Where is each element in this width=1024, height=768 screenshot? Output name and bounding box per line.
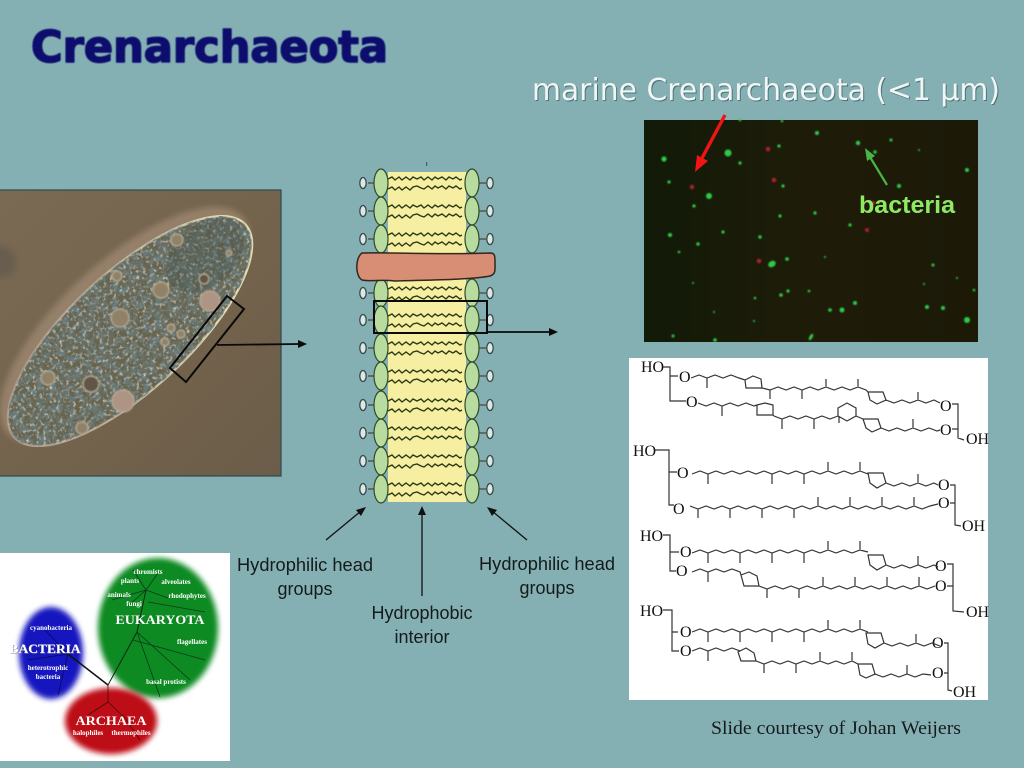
- structure 4: [640, 603, 977, 701]
- tree labels: plants: [121, 577, 139, 585]
- structure 3: O: [680, 544, 692, 561]
- tree labels: flagellates: [177, 638, 207, 646]
- green bacteria dots: [661, 119, 975, 342]
- credit: Slide courtesy of Johan Weijers: [711, 718, 961, 739]
- structure 2: O: [938, 477, 950, 494]
- panel: lipid structures: [629, 358, 990, 701]
- eukaryota blob: [98, 558, 218, 698]
- title: Crenarchaeota: [31, 22, 388, 73]
- structure 3: O: [676, 563, 688, 580]
- selection box on cell wall: [170, 296, 244, 382]
- tree labels: halophiles: [73, 729, 103, 737]
- arrow: left head groups: [326, 507, 366, 540]
- tree labels: alveolates: [161, 578, 191, 586]
- archaea blob: [65, 688, 157, 754]
- structure 2: HO: [633, 443, 656, 460]
- subtitle: marine Crenarchaeota: marine Crenarchaeota (<1 µm): [532, 73, 1000, 108]
- label: bacteria: bacteria: [859, 192, 956, 219]
- structure 2: O: [938, 495, 950, 512]
- vacuoles: [41, 234, 232, 434]
- tree labels: [10, 568, 207, 737]
- tree labels: chromists: [133, 568, 163, 576]
- structure 1: HO: [641, 359, 664, 376]
- tree labels: thermophiles: [111, 729, 151, 737]
- arrow: hydrophobic interior: [418, 506, 426, 596]
- green arrow: [865, 148, 887, 185]
- subtitle: marine Crenarchaeota: marine Crenarchaeota (<1 µm): [533, 74, 1001, 109]
- structure 2: O: [673, 501, 685, 518]
- structure 1: O: [686, 394, 698, 411]
- membrane diagram: [357, 162, 495, 503]
- tree labels: bacteria: [36, 673, 61, 681]
- red arrow: [695, 115, 725, 172]
- tree labels: basal protists: [146, 678, 186, 686]
- tree labels: animals: [107, 591, 131, 599]
- structure 3: HO: [640, 528, 663, 545]
- structure 3: O: [935, 578, 947, 595]
- label: hydrophilic head groups right: Hydrophilic head: [479, 554, 615, 574]
- tree labels: heterotrophic: [28, 664, 68, 672]
- tree labels: rhodophytes: [168, 592, 206, 600]
- structure 4: O: [680, 624, 692, 641]
- structure 1: O: [940, 422, 952, 439]
- arrow: cell to membrane: [217, 340, 307, 348]
- structure 3: [640, 528, 990, 621]
- cell body: [0, 181, 285, 481]
- label: hydrophilic head groups left: groups: [277, 579, 333, 599]
- tree labels: fungi: [126, 600, 142, 608]
- cell halo: [0, 169, 286, 481]
- tree labels: BACTERIA: [10, 641, 81, 656]
- structure 4: HO: [640, 603, 663, 620]
- structure 4: O: [932, 635, 944, 652]
- membrane protein: [357, 253, 495, 281]
- arrow: membrane to lipids: [487, 328, 558, 336]
- tree labels: cyanobacteria: [30, 624, 72, 632]
- structure 2: OH: [962, 518, 986, 535]
- structure 3: O: [935, 558, 947, 575]
- panel: cell photograph: [0, 169, 286, 481]
- label: hydrophilic head groups right: groups: [519, 578, 575, 598]
- hydrophilic head groups: [360, 169, 493, 503]
- label: hydrophobic interior: Hydrophobic: [371, 603, 473, 623]
- tree labels: ARCHAEA: [76, 713, 147, 728]
- structure 1: [641, 359, 990, 448]
- tree labels: EUKARYOTA: [116, 612, 205, 627]
- structure 1: O: [679, 369, 691, 386]
- tree branches: [28, 570, 205, 740]
- red archaea dots: [690, 147, 875, 263]
- panel: fluorescence micrograph: [644, 115, 978, 342]
- structure 1: O: [940, 398, 952, 415]
- structure 4: O: [932, 665, 944, 682]
- selection box on membrane: [374, 301, 487, 333]
- structure 3: OH: [966, 604, 990, 621]
- label: hydrophobic interior: interior: [394, 627, 450, 647]
- structure 2: [633, 443, 986, 535]
- structure 1: OH: [966, 431, 990, 448]
- structure 4: O: [680, 643, 692, 660]
- panel: tree of life: [0, 553, 230, 761]
- arrow: right head groups: [487, 507, 527, 540]
- tree labels: BACTERIA: [10, 642, 82, 657]
- label: hydrophilic head groups left: Hydrophilic head: [237, 555, 373, 575]
- structure 4: OH: [953, 684, 977, 701]
- bacteria blob: [19, 607, 83, 699]
- structure 2: O: [677, 465, 689, 482]
